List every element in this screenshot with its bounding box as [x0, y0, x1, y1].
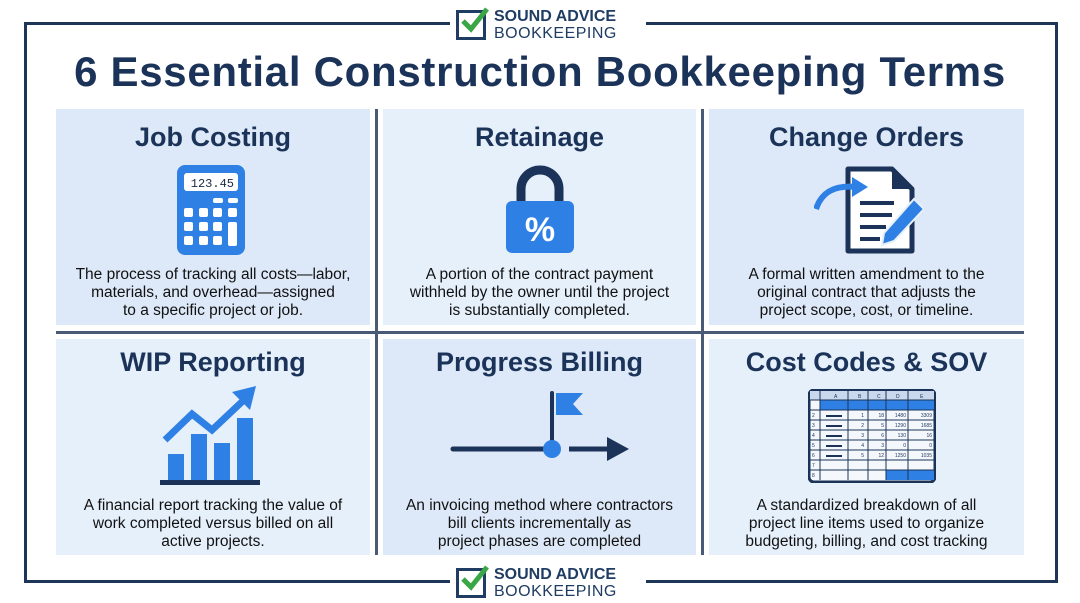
text	[745, 497, 988, 550]
text: A formal written amendment to the	[748, 266, 985, 283]
text: withheld by the owner until the project	[410, 284, 669, 301]
heading: Cost Codes & SOV	[746, 347, 987, 377]
icon: spreadsheet: 16	[926, 433, 932, 439]
title: 6 Essential Construction Bookkeeping Terms	[74, 48, 1006, 95]
icon: lock: %	[525, 211, 555, 249]
text: budgeting, billing, and cost tracking	[745, 533, 988, 550]
text: work completed versus billed on all	[93, 515, 333, 532]
logo bottom: SOUND ADVICE	[494, 566, 616, 583]
text: A financial report tracking the value of	[84, 497, 342, 514]
icon: spreadsheet: 1	[861, 413, 864, 419]
logo bottom: BOOKKEEPING	[494, 583, 617, 600]
icon: spreadsheet: 6	[881, 433, 884, 439]
panel: retainage	[383, 109, 696, 325]
icon: spreadsheet: D	[896, 394, 900, 400]
text: original contract that adjusts the	[757, 284, 976, 301]
text: to a specific project or job.	[123, 302, 303, 319]
icon: spreadsheet: 0	[903, 443, 906, 449]
icon: spreadsheet	[808, 389, 936, 483]
text: project phases are completed	[438, 533, 641, 550]
heading: Retainage	[475, 122, 604, 152]
logo top: SOUND ADVICE	[494, 8, 616, 25]
icon: spreadsheet: 4	[861, 443, 864, 449]
icon: spreadsheet: 1250	[895, 453, 906, 459]
icon: spreadsheet: 6	[812, 453, 815, 459]
text: The process of tracking all costs—labor,	[76, 266, 350, 283]
icon: spreadsheet: 1480	[895, 413, 906, 419]
panel: wip reporting	[56, 339, 370, 555]
text: bill clients incrementally as	[448, 515, 631, 532]
icon: spreadsheet: 4	[812, 433, 815, 439]
logo bottom	[450, 561, 646, 601]
icon: spreadsheet: 2	[812, 413, 815, 419]
panel: cost codes & sov	[709, 339, 1024, 555]
heading: WIP Reporting	[120, 347, 306, 377]
icon: spreadsheet: 3309	[921, 413, 932, 419]
heading: Progress Billing	[436, 347, 643, 377]
text: materials, and overhead—assigned	[91, 284, 335, 301]
icon: spreadsheet: 2	[861, 423, 864, 429]
dividers	[375, 109, 378, 555]
icon: spreadsheet: 3	[861, 433, 864, 439]
text	[76, 266, 350, 319]
icon: timeline with flag	[450, 391, 629, 461]
icon: spreadsheet: 3	[881, 443, 884, 449]
icon: spreadsheet: 130	[898, 433, 906, 439]
icon: spreadsheet: 1290	[895, 423, 906, 429]
text: is substantially completed.	[449, 302, 630, 319]
heading: Change Orders	[769, 122, 964, 152]
text	[406, 497, 673, 550]
icon: calculator	[177, 165, 245, 255]
icon: spreadsheet: B	[858, 394, 862, 400]
text: An invoicing method where contractors	[406, 497, 673, 514]
icon: spreadsheet: 12	[878, 453, 884, 459]
icon: spreadsheet: C	[877, 394, 881, 400]
logo top	[450, 3, 646, 43]
icon: spreadsheet: 7	[812, 463, 815, 469]
icon: bar chart with arrow	[160, 386, 260, 485]
text: A standardized breakdown of all	[757, 497, 976, 514]
icon: spreadsheet: 1035	[921, 453, 932, 459]
text: project scope, cost, or timeline.	[760, 302, 973, 319]
icon: spreadsheet: 1685	[921, 423, 932, 429]
icon: spreadsheet: 5	[881, 423, 884, 429]
icon: lock	[506, 166, 574, 253]
text	[748, 266, 985, 319]
text: active projects.	[161, 533, 265, 550]
icon: calculator: 123.45	[191, 177, 234, 191]
icon: spreadsheet: A	[834, 394, 838, 400]
text	[410, 266, 670, 319]
heading: Job Costing	[135, 122, 291, 152]
icon: spreadsheet: 3	[812, 423, 815, 429]
icon: spreadsheet: 18	[878, 413, 884, 419]
icon: document with pencil	[814, 166, 924, 254]
text: A portion of the contract payment	[426, 266, 653, 283]
text	[84, 497, 342, 550]
icon: spreadsheet: E	[920, 394, 924, 400]
logo top: BOOKKEEPING	[494, 25, 617, 42]
panel: progress billing	[383, 339, 696, 555]
icon: spreadsheet: 8	[812, 473, 815, 479]
panel: change orders	[709, 109, 1024, 325]
text: project line items used to organize	[749, 515, 984, 532]
panel: job costing	[56, 109, 370, 325]
icon: spreadsheet: 5	[812, 443, 815, 449]
icon: spreadsheet: 0	[929, 443, 932, 449]
icon: spreadsheet: 5	[861, 453, 864, 459]
